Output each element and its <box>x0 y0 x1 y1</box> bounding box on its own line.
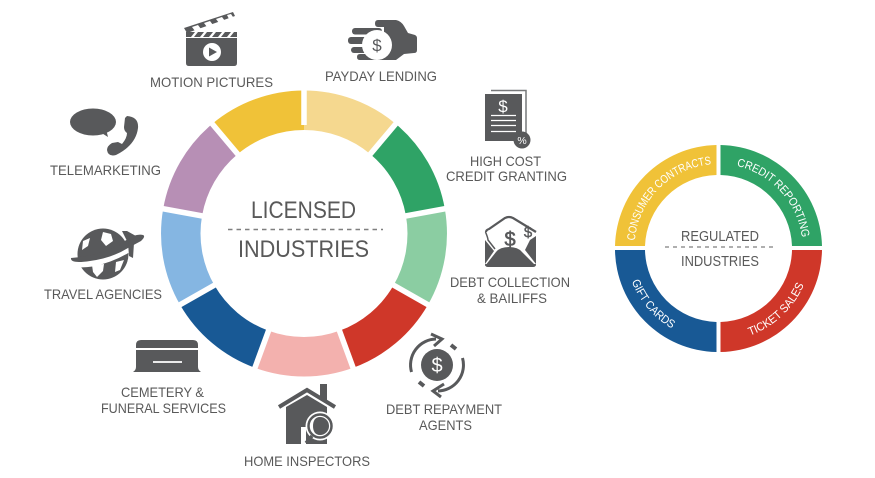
label: debt repayment agents: DEBT REPAYMENT <box>386 401 502 417</box>
icon: envelope with dollars <box>485 217 536 267</box>
segment: payday lending <box>304 90 396 154</box>
label: debt collection and bailiffs: DEBT COLLECTION <box>450 274 570 290</box>
segment: high cost credit granting <box>370 124 445 216</box>
segment: debt repayment <box>339 285 428 368</box>
icon: envelope with dollars: $ <box>524 224 533 241</box>
label: debt repayment agents: AGENTS <box>419 417 472 433</box>
label: debt collection and bailiffs <box>450 274 570 306</box>
center title: regulated industries: REGULATED <box>681 229 759 245</box>
label: debt collection and bailiffs: & BAILIFFS <box>477 290 547 306</box>
icon: hand with coin: $ <box>372 36 382 55</box>
icon: speech bubble and phone <box>70 108 138 155</box>
segment: travel agencies <box>161 209 214 305</box>
segment: ticket sales: TICKET SALES <box>747 282 803 335</box>
label: telemarketing: TELEMARKETING <box>50 162 161 178</box>
icon: casket <box>133 340 201 372</box>
center title: licensed industries <box>228 197 383 263</box>
label: payday lending: PAYDAY LENDING <box>325 68 437 84</box>
segment: motion pictures <box>212 90 304 154</box>
icon: document with percent <box>485 90 530 148</box>
label: motion pictures: MOTION PICTURES <box>150 74 273 90</box>
segment: credit reporting: CREDIT REPORTING <box>738 159 810 237</box>
center title: licensed industries: INDUSTRIES <box>238 236 369 263</box>
label: high cost credit granting <box>446 153 567 184</box>
segment: consumer contracts: CONSUMER CONTRACTS <box>627 156 711 240</box>
icon: envelope with dollars: $ <box>504 229 516 251</box>
donut chart: regulated industries <box>615 145 822 352</box>
label: cemetery and funeral services: CEMETERY & <box>121 384 205 400</box>
segment: home inspectors <box>255 331 353 377</box>
label: debt repayment agents <box>386 401 502 433</box>
label: high cost credit granting: CREDIT GRANTING <box>446 168 567 184</box>
segment: telemarketing <box>163 124 238 216</box>
icon: globe and plane <box>70 228 144 280</box>
label: home inspectors: HOME INSPECTORS <box>244 453 370 469</box>
segment: ticket sales <box>720 250 822 352</box>
donut chart: licensed industries <box>159 85 449 377</box>
icon: clapperboard <box>184 12 237 66</box>
icon: document with percent: $ <box>498 97 508 116</box>
label: cemetery and funeral services <box>101 384 226 416</box>
center title: regulated industries <box>665 229 775 270</box>
label: high cost credit granting: HIGH COST <box>470 153 541 169</box>
segment: debt collection <box>394 209 447 305</box>
segment: gift cards <box>615 250 716 352</box>
label: cemetery and funeral services: FUNERAL SERVICES <box>101 400 226 416</box>
label: travel agencies: TRAVEL AGENCIES <box>44 286 162 302</box>
icon: debt repayment cycle: $ <box>431 355 443 377</box>
center title: licensed industries: LICENSED <box>251 197 356 224</box>
icon: hand with coin <box>348 20 417 60</box>
icon: debt repayment cycle <box>411 334 463 397</box>
segment: gift cards: GIFT CARDS <box>632 280 675 328</box>
segment: cemetery <box>180 285 269 368</box>
center title: regulated industries: INDUSTRIES <box>681 254 759 270</box>
segment: credit reporting <box>720 145 822 246</box>
icon: house with magnifier <box>279 384 335 444</box>
icon: document with percent: % <box>517 135 527 147</box>
